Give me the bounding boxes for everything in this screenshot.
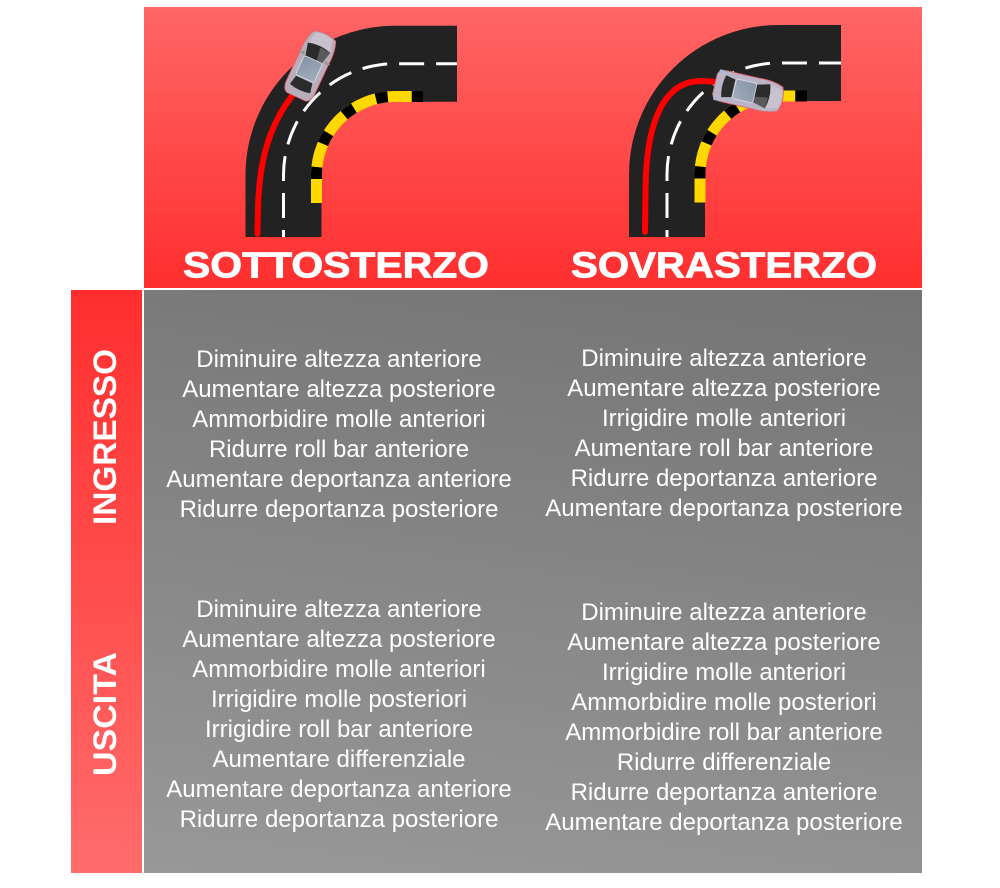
text block: oversteer on entry: Aumentare roll bar anteriore (575, 435, 873, 462)
text block: oversteer on exit: Ammorbidire molle posteriori (571, 689, 877, 716)
text block: oversteer on exit (545, 599, 903, 836)
trajectory: oversteer (645, 81, 716, 232)
text block: understeer on exit: Ammorbidire molle anteriori (192, 656, 486, 683)
text block: understeer on exit: Diminuire altezza anteriore (196, 596, 482, 623)
text block: understeer on exit: Ridurre deportanza posteriore (180, 806, 498, 833)
car: oversteer (711, 69, 786, 115)
curb: understeer (316, 96, 423, 203)
heading: sottosterzo: SOTTOSTERZO (183, 244, 489, 286)
text block: oversteer on entry: Diminuire altezza anteriore (581, 345, 867, 372)
text block: oversteer on entry: Aumentare altezza posteriore (567, 375, 881, 402)
side heading: uscita: USCITA (87, 652, 123, 776)
text block: understeer on entry: Aumentare altezza posteriore (182, 376, 496, 403)
centre line: oversteer (667, 63, 841, 237)
text block: understeer on entry: Diminuire altezza anteriore (196, 346, 482, 373)
text block: oversteer on exit: Ridurre deportanza anteriore (571, 779, 877, 806)
text block: oversteer on entry: Ridurre deportanza anteriore (571, 465, 877, 492)
trajectory: understeer (258, 96, 292, 234)
text block: oversteer on entry (545, 345, 903, 522)
heading: sovrasterzo: SOVRASTERZO (571, 244, 877, 286)
text block: understeer on exit: Irrigidire molle posteriori (211, 686, 467, 713)
text block: understeer on entry (166, 346, 512, 523)
text block: understeer on exit: Aumentare deportanza anteriore (166, 776, 512, 803)
panel: grey content background (144, 290, 922, 873)
text block: understeer on entry: Ridurre roll bar anteriore (209, 436, 469, 463)
text block: understeer on entry: Aumentare deportanza anteriore (166, 466, 512, 493)
text block: understeer on exit (166, 596, 512, 833)
panel: header background (144, 7, 922, 288)
text block: oversteer on exit: Diminuire altezza anteriore (581, 599, 867, 626)
text block: oversteer on exit: Ammorbidire roll bar anteriore (565, 719, 883, 746)
text block: oversteer on exit: Aumentare deportanza posteriore (545, 809, 903, 836)
car: understeer (280, 26, 342, 104)
text block: understeer on exit: Aumentare differenziale (212, 746, 466, 773)
road: understeer (284, 64, 457, 237)
centre line: understeer (284, 64, 457, 237)
text block: understeer on entry: Ammorbidire molle anteriori (192, 406, 486, 433)
text block: oversteer on exit: Aumentare altezza posteriore (567, 629, 881, 656)
text block: oversteer on entry: Aumentare deportanza posteriore (545, 495, 903, 522)
text block: understeer on entry: Ridurre deportanza posteriore (180, 496, 498, 523)
side heading: ingresso: INGRESSO (87, 349, 123, 525)
text block: oversteer on exit: Ridurre differenziale (617, 749, 831, 776)
curb: oversteer (700, 96, 807, 202)
road: oversteer (667, 63, 841, 237)
text block: oversteer on exit: Irrigidire molle anteriori (602, 659, 846, 686)
text block: oversteer on entry: Irrigidire molle anteriori (602, 405, 846, 432)
panel: side header background (71, 290, 142, 873)
text block: understeer on exit: Irrigidire roll bar anteriore (205, 716, 473, 743)
text block: understeer on exit: Aumentare altezza posteriore (182, 626, 496, 653)
